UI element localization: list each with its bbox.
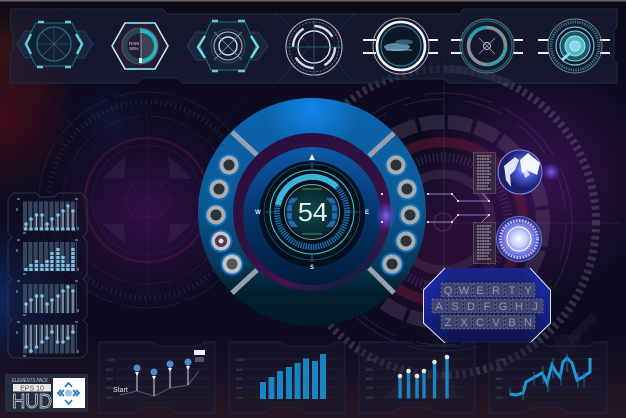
equalizer 4 bbox=[23, 325, 77, 353]
compass letters: W bbox=[255, 210, 261, 216]
icon: hex radar bbox=[17, 22, 93, 67]
key letters: J bbox=[532, 301, 538, 313]
left equalizer panel bbox=[8, 193, 87, 358]
key letters: H bbox=[515, 301, 523, 313]
chart panel: start line bbox=[99, 342, 215, 413]
chart panel: candlesticks: 20% bbox=[496, 396, 503, 400]
key letters: F bbox=[484, 301, 491, 313]
chart panel: blue bars: 60% bbox=[236, 377, 243, 381]
background radar: left bbox=[39, 92, 255, 308]
dial separators bbox=[232, 132, 394, 293]
key letters: Y bbox=[524, 285, 532, 297]
key letters: Z bbox=[445, 317, 452, 329]
key letters: R bbox=[492, 285, 500, 297]
chart panel: blue bars: 100% bbox=[236, 358, 245, 362]
key letters: W bbox=[459, 285, 470, 297]
key letters: C bbox=[476, 317, 484, 329]
key letters: B bbox=[508, 317, 516, 329]
chart panel: start line: 20% bbox=[106, 396, 113, 400]
equalizer 2 bbox=[23, 248, 77, 271]
reading 54: 54 bbox=[297, 200, 327, 230]
chart panel: blue bars: 80% bbox=[236, 368, 243, 372]
key letters: A bbox=[435, 301, 443, 313]
text block lower bbox=[474, 222, 496, 264]
equalizer 3 bbox=[23, 285, 77, 313]
icon: cyan target bbox=[538, 19, 610, 73]
gauge readout bbox=[264, 162, 360, 262]
chart panel: candlesticks: 80% bbox=[496, 368, 503, 372]
icon: hex RAM gauge: 50% bbox=[129, 46, 139, 51]
chart panel: lollipops: 100% bbox=[366, 358, 375, 362]
chart panel: candlesticks: 100% bbox=[496, 358, 505, 362]
equalizer 1 bbox=[23, 204, 77, 229]
icon: hex RAM gauge bbox=[112, 23, 168, 69]
key letters: S bbox=[451, 301, 459, 313]
chart panel: start line: 60% bbox=[106, 377, 113, 381]
key letters: T bbox=[509, 285, 516, 297]
compass letters: S bbox=[310, 265, 314, 271]
key letters: V bbox=[492, 317, 500, 329]
icon: white ring reticle bbox=[286, 19, 342, 75]
chart panel: start line: 40% bbox=[106, 386, 113, 390]
chart panel: candlesticks: 60% bbox=[496, 377, 503, 381]
chart panel: lollipops: 80% bbox=[366, 368, 373, 372]
key letters: E bbox=[476, 285, 484, 297]
chart panel: start line: 100% bbox=[106, 358, 115, 362]
icon: globe bbox=[498, 150, 560, 194]
chart panel: candlesticks bbox=[489, 342, 607, 413]
connector lines bbox=[381, 193, 490, 223]
chart panel: blue bars: 20% bbox=[236, 396, 243, 400]
chart panel: lollipops: 40% bbox=[366, 386, 373, 390]
key letters: G bbox=[499, 301, 507, 313]
key letters: X bbox=[460, 317, 468, 329]
icon: circular gauge bbox=[451, 19, 523, 73]
chart panel: lollipops: 20% bbox=[366, 396, 373, 400]
chart panel: start line: 80% bbox=[106, 368, 113, 372]
key letters bbox=[435, 285, 538, 329]
keyboard panel bbox=[423, 268, 551, 343]
dial buttons right bbox=[380, 154, 422, 276]
key letters: N bbox=[524, 317, 532, 329]
badge: HUD elements pack: EPS 10 bbox=[20, 386, 44, 392]
icon: ship scope bbox=[363, 18, 438, 74]
icon: arrows tile bbox=[53, 378, 85, 408]
key letters: D bbox=[467, 301, 475, 313]
chart panel: lollipops bbox=[359, 342, 475, 413]
main circular dial bbox=[198, 98, 426, 326]
badge: HUD elements pack: ELEMENTS PACK bbox=[12, 378, 49, 384]
badge: HUD elements pack: HUD bbox=[12, 391, 52, 413]
key caps bbox=[432, 283, 543, 329]
badge: HUD elements pack bbox=[5, 374, 88, 413]
chart panel: blue bars bbox=[229, 342, 345, 413]
icon: hex RAM gauge: RAM bbox=[129, 41, 139, 46]
chart panel: start line: Start bbox=[113, 387, 128, 394]
dial buttons left bbox=[204, 154, 244, 276]
chart panel: candlesticks: 40% bbox=[496, 386, 503, 390]
compass letters bbox=[255, 154, 369, 271]
compass letters: E bbox=[365, 210, 369, 216]
chart panel: blue bars: 40% bbox=[236, 386, 243, 390]
chart panel: lollipops: 60% bbox=[366, 377, 373, 381]
icon: glowing disc bbox=[496, 216, 542, 262]
key letters: Q bbox=[444, 285, 453, 297]
icon: hex reticle bbox=[187, 21, 268, 71]
background radar: right bbox=[290, 60, 622, 398]
top icon panel bbox=[10, 9, 617, 83]
text block upper bbox=[474, 152, 496, 194]
